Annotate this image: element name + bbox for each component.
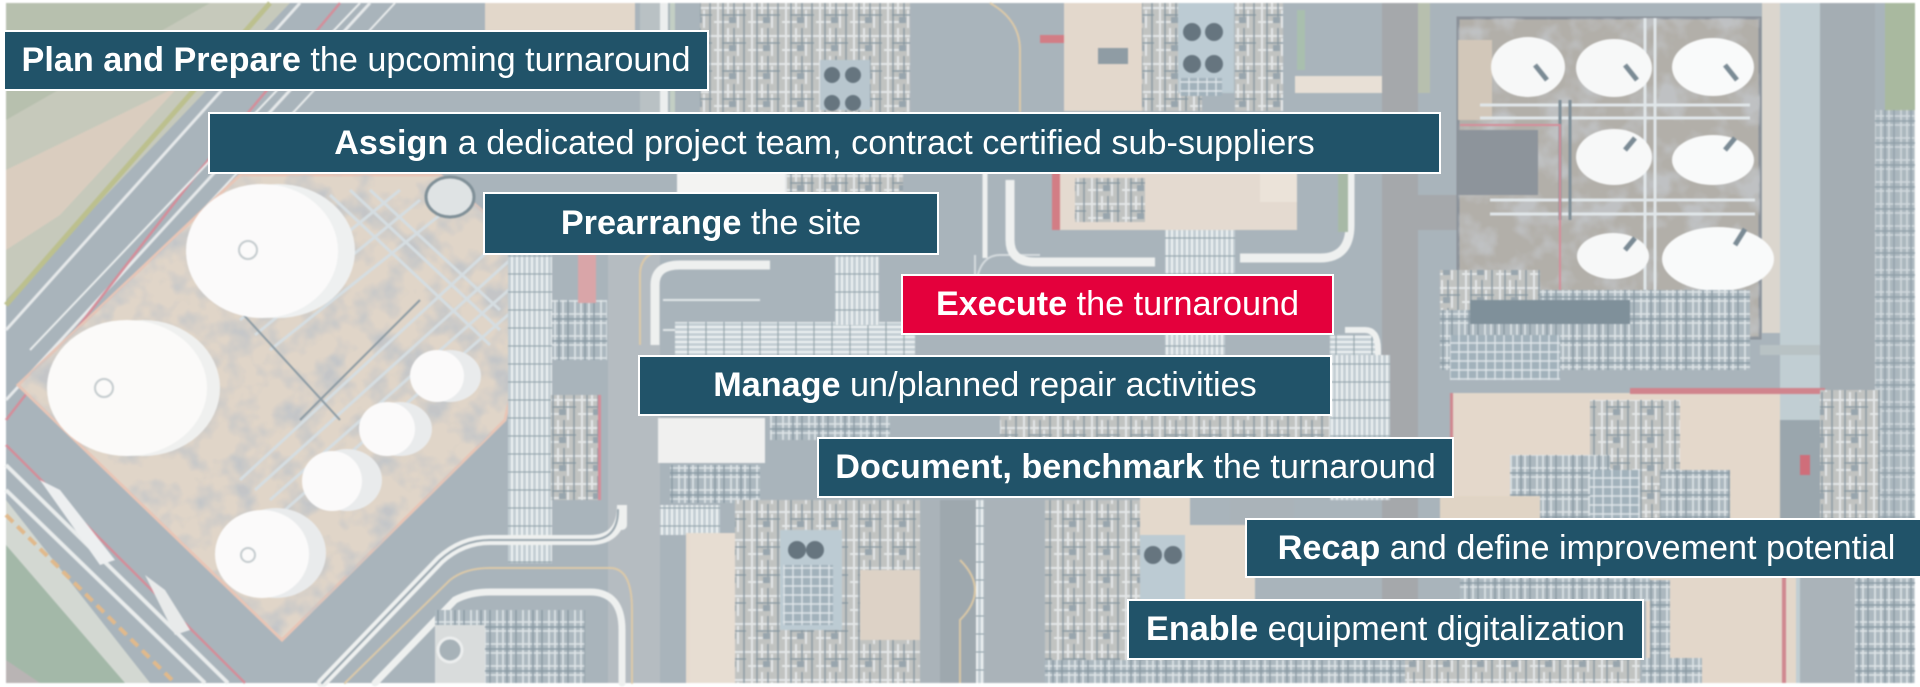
lower centre sand slab and fan unit: [686, 500, 940, 683]
vertical pipe rack, left centre: [508, 253, 607, 563]
central road: [608, 253, 660, 683]
beige slab and machinery, lower right: [1450, 388, 1880, 520]
step bar: Enable: [1129, 601, 1642, 658]
curved perimeter pipes, bottom centre-left: [322, 505, 632, 683]
step bar: Document, benchmark: Document, benchmark the turnaround: [835, 448, 1436, 486]
step bar: Recap: [1247, 520, 1920, 576]
mid centre-right beige slab: [1052, 172, 1348, 232]
centre-right pipe bands behind document bar: [1000, 355, 1540, 525]
step bar: Manage: Manage un/planned repair activities: [713, 366, 1257, 404]
white building and pipe cluster, centre: [658, 415, 890, 535]
step bar: Assign: Assign a dedicated project team, contract certified sub-suppliers: [334, 124, 1315, 162]
tank farm diamond ground: [18, 175, 540, 640]
bottom-left green verge and roads: [6, 445, 245, 683]
step bar: Plan and Prepare: Plan and Prepare the upcoming turnaround: [22, 41, 690, 79]
dense machinery, right middle: [1440, 270, 1820, 380]
step bar: Enable: Enable equipment digitalization: [1146, 610, 1625, 648]
white building, upper: [677, 173, 903, 194]
step bar: Manage: [640, 357, 1330, 414]
storage tanks, left group: [47, 177, 481, 598]
upper centre-right beige and fan unit: [1040, 3, 1385, 111]
top-left green and sand verge: [6, 3, 395, 420]
step bar: Prearrange: [485, 194, 937, 253]
diagonal pipe bundles in tank farm: [230, 190, 525, 510]
centre blocks of loops: [975, 3, 1378, 440]
step bar: Document, benchmark: [819, 439, 1452, 496]
main vertical road, right of centre: [1382, 3, 1510, 683]
right tank farm enclosure: [1458, 3, 1835, 683]
top centre sand ground: [485, 3, 660, 113]
step bar: Recap: Recap and define improvement potential: [1278, 529, 1895, 567]
pipes inside tank farm: [1460, 18, 1755, 300]
centre-left perimeter loops: [640, 250, 800, 345]
step bar: Prearrange: Prearrange the site: [561, 204, 861, 242]
lower centre-right column: [940, 495, 1405, 683]
step bar: Execute (highlighted): Execute the turnaround: [936, 285, 1299, 323]
step bar: Assign: [210, 114, 1439, 172]
far right strip: green field and road: [1820, 3, 1915, 683]
lower right slab: [1400, 576, 1915, 683]
bottom-left process unit: [435, 610, 585, 683]
central upper process unit: [660, 3, 910, 113]
step bar: Plan and Prepare: [5, 32, 707, 89]
step bar: Execute (highlighted): [903, 276, 1332, 333]
horizontal pipe band across centre: [675, 172, 1376, 358]
spherical storage vessels, right group: [1491, 37, 1774, 291]
